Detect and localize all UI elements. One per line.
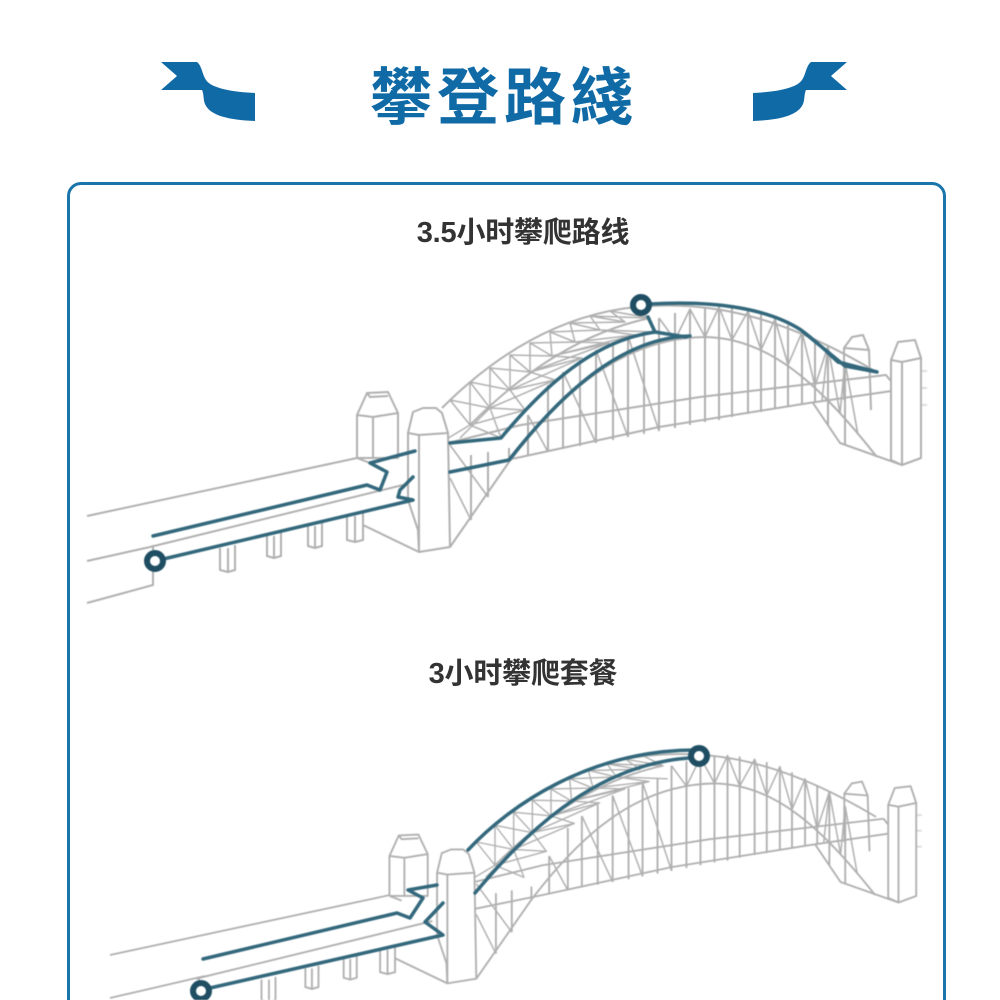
start marker bbox=[147, 553, 163, 569]
panel: climb routes bbox=[67, 182, 946, 1000]
heading: 3.5 hour climb: 3.5小时攀爬路线 bbox=[417, 217, 629, 249]
start marker bbox=[193, 983, 209, 999]
route: 3 hour teal path bbox=[203, 750, 696, 988]
left ribbon bbox=[161, 62, 255, 121]
route: 3.5 hour teal path bbox=[153, 303, 877, 561]
heading: 3 hour climb: 3小时攀爬套餐 bbox=[429, 658, 617, 690]
summit marker bbox=[633, 297, 649, 313]
right ribbon bbox=[753, 62, 847, 121]
summit marker bbox=[691, 748, 707, 764]
title: 攀登路綫 bbox=[370, 64, 638, 133]
